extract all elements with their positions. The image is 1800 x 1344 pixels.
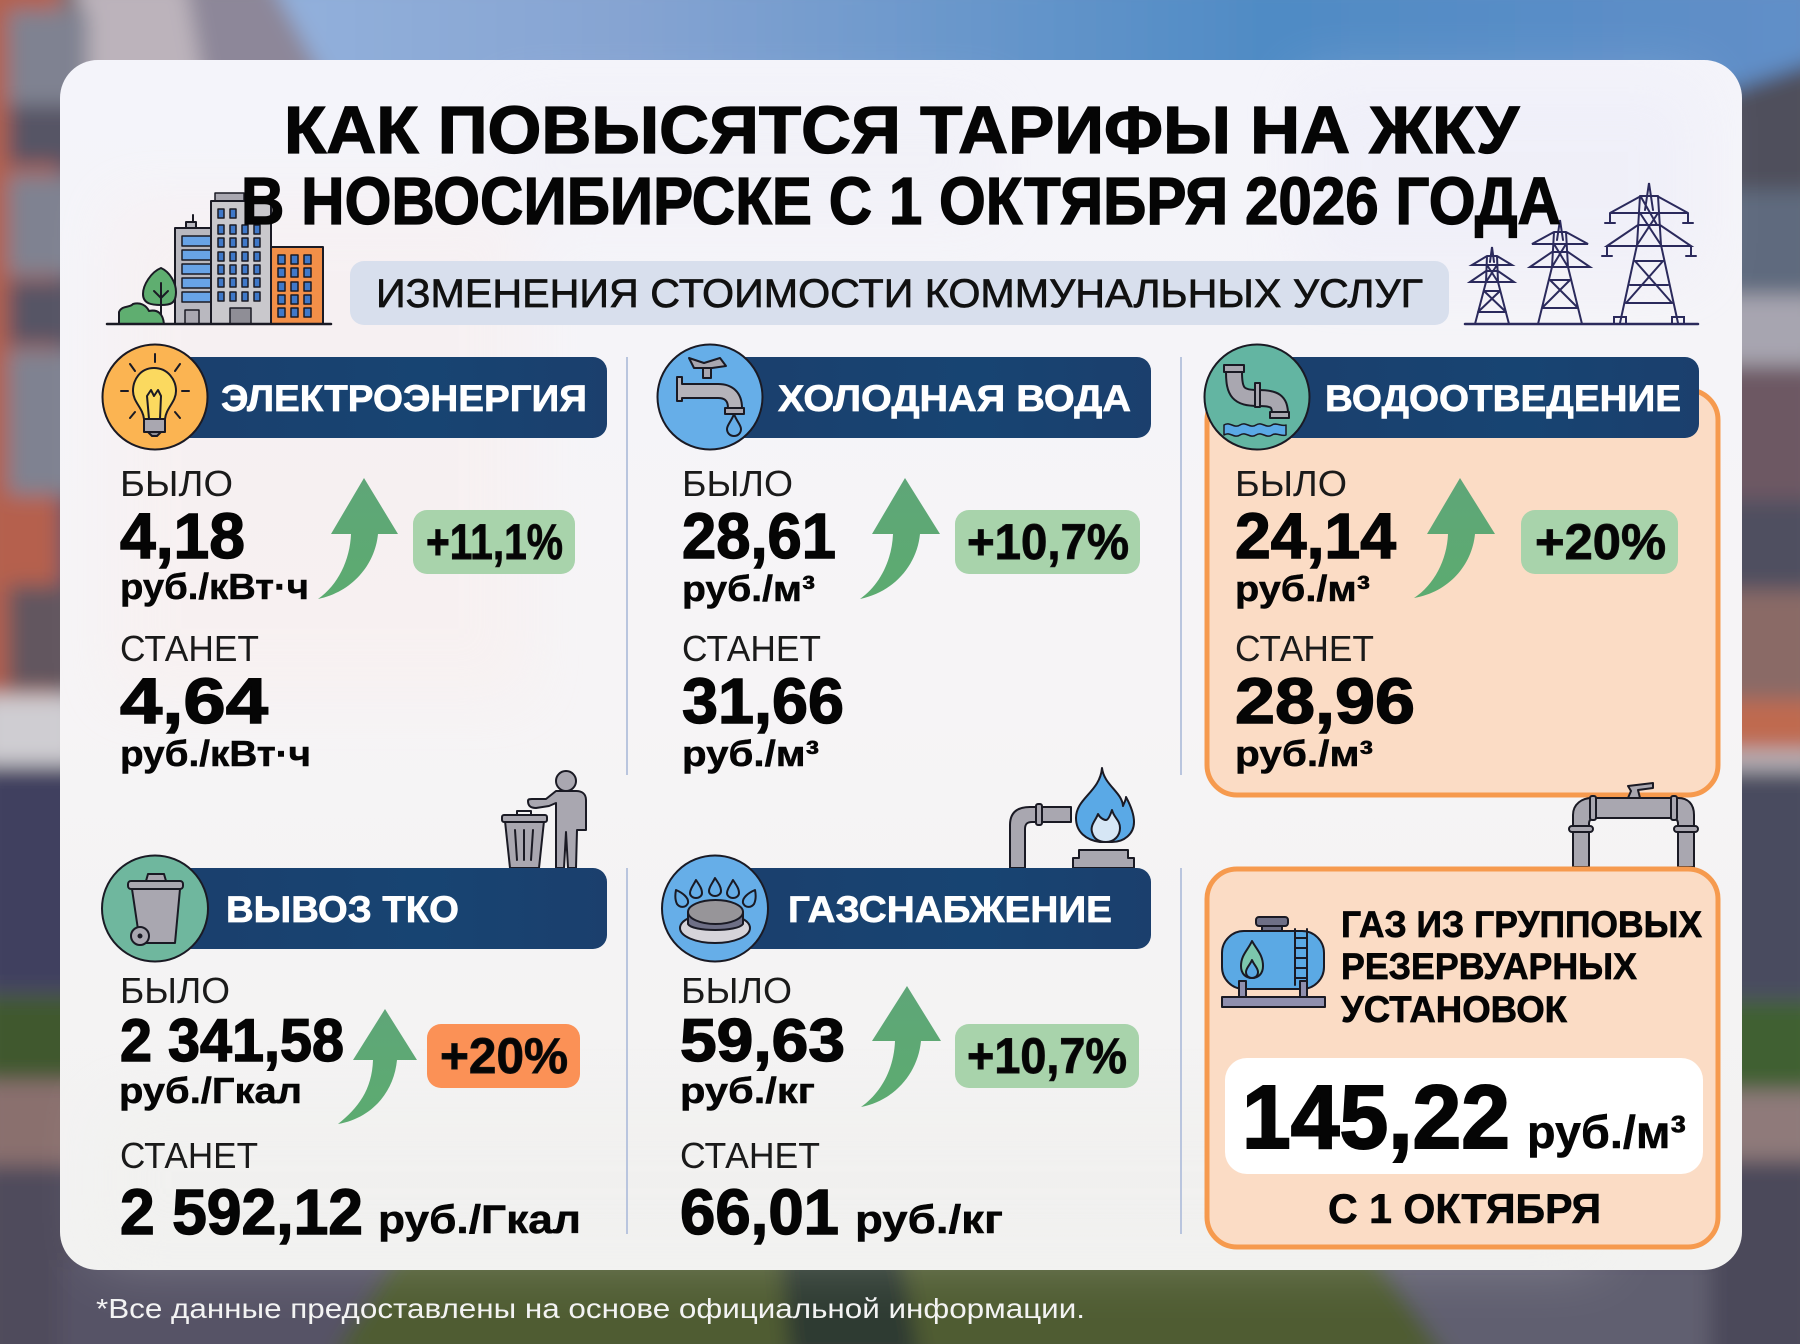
waste removal: new value: СТАНЕТ bbox=[120, 1135, 258, 1176]
icon: water tap bbox=[658, 344, 762, 450]
electricity header bbox=[154, 357, 607, 438]
arrow up bbox=[1414, 478, 1495, 598]
waste removal: new value: руб./Гкал bbox=[378, 1198, 581, 1242]
gas supply header bbox=[715, 868, 1151, 949]
gas supply: was value: 59,63 bbox=[680, 1007, 845, 1074]
footnote: *Все данные предоставлены на основе официальной информации. bbox=[96, 1293, 1085, 1324]
arrow up bbox=[338, 1009, 417, 1124]
arrow up bbox=[861, 986, 941, 1107]
waste removal: new value: 2 592,12 bbox=[120, 1176, 363, 1248]
gas panel heading: РЕЗЕРВУАРНЫХ bbox=[1341, 946, 1637, 987]
electricity: new value bbox=[120, 628, 311, 774]
subtitle pill bbox=[350, 261, 1449, 325]
increase badge: +20% bbox=[1535, 514, 1666, 570]
gas panel heading: УСТАНОВОК bbox=[1341, 989, 1567, 1030]
gas supply: new value: СТАНЕТ bbox=[680, 1135, 820, 1176]
wastewater: was value: БЫЛО bbox=[1235, 463, 1347, 504]
panel: waste removal bbox=[102, 856, 607, 1248]
gas panel heading bbox=[1341, 904, 1702, 1030]
icon: pipe with valve bbox=[1569, 783, 1698, 867]
panel: gas from group tanks bbox=[1207, 869, 1718, 1247]
electricity header: ЭЛЕКТРОЭНЕРГИЯ bbox=[221, 378, 587, 419]
electricity: new value: руб./кВт·ч bbox=[120, 733, 311, 774]
waste removal: was value: БЫЛО bbox=[120, 970, 230, 1011]
column dividers bbox=[627, 357, 1181, 1234]
panel: gas supply bbox=[662, 856, 1151, 1248]
cold water: new value: 31,66 bbox=[682, 665, 844, 737]
subtitle pill: ИЗМЕНЕНИЯ СТОИМОСТИ КОММУНАЛЬНЫХ УСЛУГ bbox=[376, 272, 1423, 316]
price box bbox=[1225, 1058, 1703, 1174]
wastewater: was value bbox=[1235, 463, 1396, 609]
gas supply: new value: руб./кг bbox=[855, 1198, 1003, 1242]
cold water: was value: 28,61 bbox=[682, 500, 836, 572]
increase badge: +10,7% bbox=[967, 514, 1129, 570]
electricity: was value: БЫЛО bbox=[120, 463, 233, 504]
arrow up bbox=[860, 478, 940, 599]
gas supply: new value bbox=[680, 1135, 1003, 1248]
cold water: was value: БЫЛО bbox=[682, 463, 793, 504]
icon: waste container bbox=[102, 856, 208, 962]
wastewater orange box bbox=[1207, 390, 1718, 795]
wastewater header bbox=[1256, 357, 1699, 438]
cold water: new value: СТАНЕТ bbox=[682, 628, 821, 669]
icon: drain pipe bbox=[1204, 344, 1310, 450]
gas supply: new value: 66,01 bbox=[680, 1176, 839, 1248]
waste removal: was value: 2 341,58 bbox=[120, 1007, 344, 1074]
wastewater: new value: руб./м³ bbox=[1235, 733, 1373, 774]
gas panel heading: ГАЗ ИЗ ГРУППОВЫХ bbox=[1341, 904, 1702, 945]
increase badge: +11,1% bbox=[426, 514, 563, 570]
wastewater: was value: 24,14 bbox=[1235, 500, 1396, 572]
waste removal header: ВЫВОЗ ТКО bbox=[226, 889, 459, 930]
gas supply: was value: БЫЛО bbox=[681, 970, 792, 1011]
electricity: new value: СТАНЕТ bbox=[120, 628, 259, 669]
gas supply: was value: руб./кг bbox=[680, 1070, 815, 1111]
panel: wastewater bbox=[1204, 344, 1718, 795]
gas supply header: ГАЗСНАБЖЕНИЕ bbox=[788, 889, 1112, 930]
panel: electricity bbox=[102, 344, 607, 774]
waste removal: new value bbox=[120, 1135, 581, 1248]
electricity: was value: 4,18 bbox=[120, 500, 245, 572]
date label: С 1 ОКТЯБРЯ bbox=[1328, 1185, 1601, 1232]
icon: gas tank bbox=[1222, 917, 1325, 1007]
price box: руб./м³ bbox=[1527, 1106, 1686, 1158]
wastewater: new value: 28,96 bbox=[1235, 665, 1415, 737]
cold water: was value: руб./м³ bbox=[682, 568, 815, 609]
cold water: new value: руб./м³ bbox=[682, 733, 819, 774]
cold water: was value bbox=[682, 463, 836, 609]
icon: light bulb bbox=[102, 344, 208, 450]
icon: power pylons bbox=[1465, 183, 1698, 324]
increase badge: +10,7% bbox=[967, 1028, 1127, 1084]
price box: 145,22 bbox=[1242, 1068, 1510, 1168]
electricity: new value: 4,64 bbox=[120, 665, 268, 737]
cold water header: ХОЛОДНАЯ ВОДА bbox=[778, 378, 1131, 419]
arrow up bbox=[318, 478, 398, 599]
icon: gas burner bbox=[662, 856, 768, 962]
cold water: new value bbox=[682, 628, 844, 774]
title: В НОВОСИБИРСКЕ С 1 ОКТЯБРЯ 2026 ГОДА bbox=[241, 164, 1561, 239]
gas supply: was value bbox=[680, 970, 845, 1111]
title bbox=[241, 93, 1561, 239]
wastewater: new value bbox=[1235, 628, 1415, 774]
gas panel box bbox=[1207, 869, 1718, 1247]
icon: gas pipe with flame bbox=[1010, 768, 1134, 868]
wastewater header: ВОДООТВЕДЕНИЕ bbox=[1325, 378, 1681, 419]
electricity: was value: руб./кВт·ч bbox=[120, 566, 309, 607]
electricity: was value bbox=[120, 463, 309, 607]
panel: cold water bbox=[658, 344, 1151, 774]
waste removal: was value: руб./Гкал bbox=[119, 1070, 302, 1111]
wastewater: new value: СТАНЕТ bbox=[1235, 628, 1374, 669]
wastewater: was value: руб./м³ bbox=[1235, 568, 1370, 609]
increase badge: +20% bbox=[440, 1028, 568, 1084]
icon: city buildings bbox=[107, 193, 331, 324]
waste removal header bbox=[155, 868, 607, 949]
title: КАК ПОВЫСЯТСЯ ТАРИФЫ НА ЖКУ bbox=[284, 93, 1520, 168]
icon: person with trash bin bbox=[502, 771, 586, 868]
cold water header bbox=[710, 357, 1151, 438]
waste removal: was value bbox=[119, 970, 344, 1111]
